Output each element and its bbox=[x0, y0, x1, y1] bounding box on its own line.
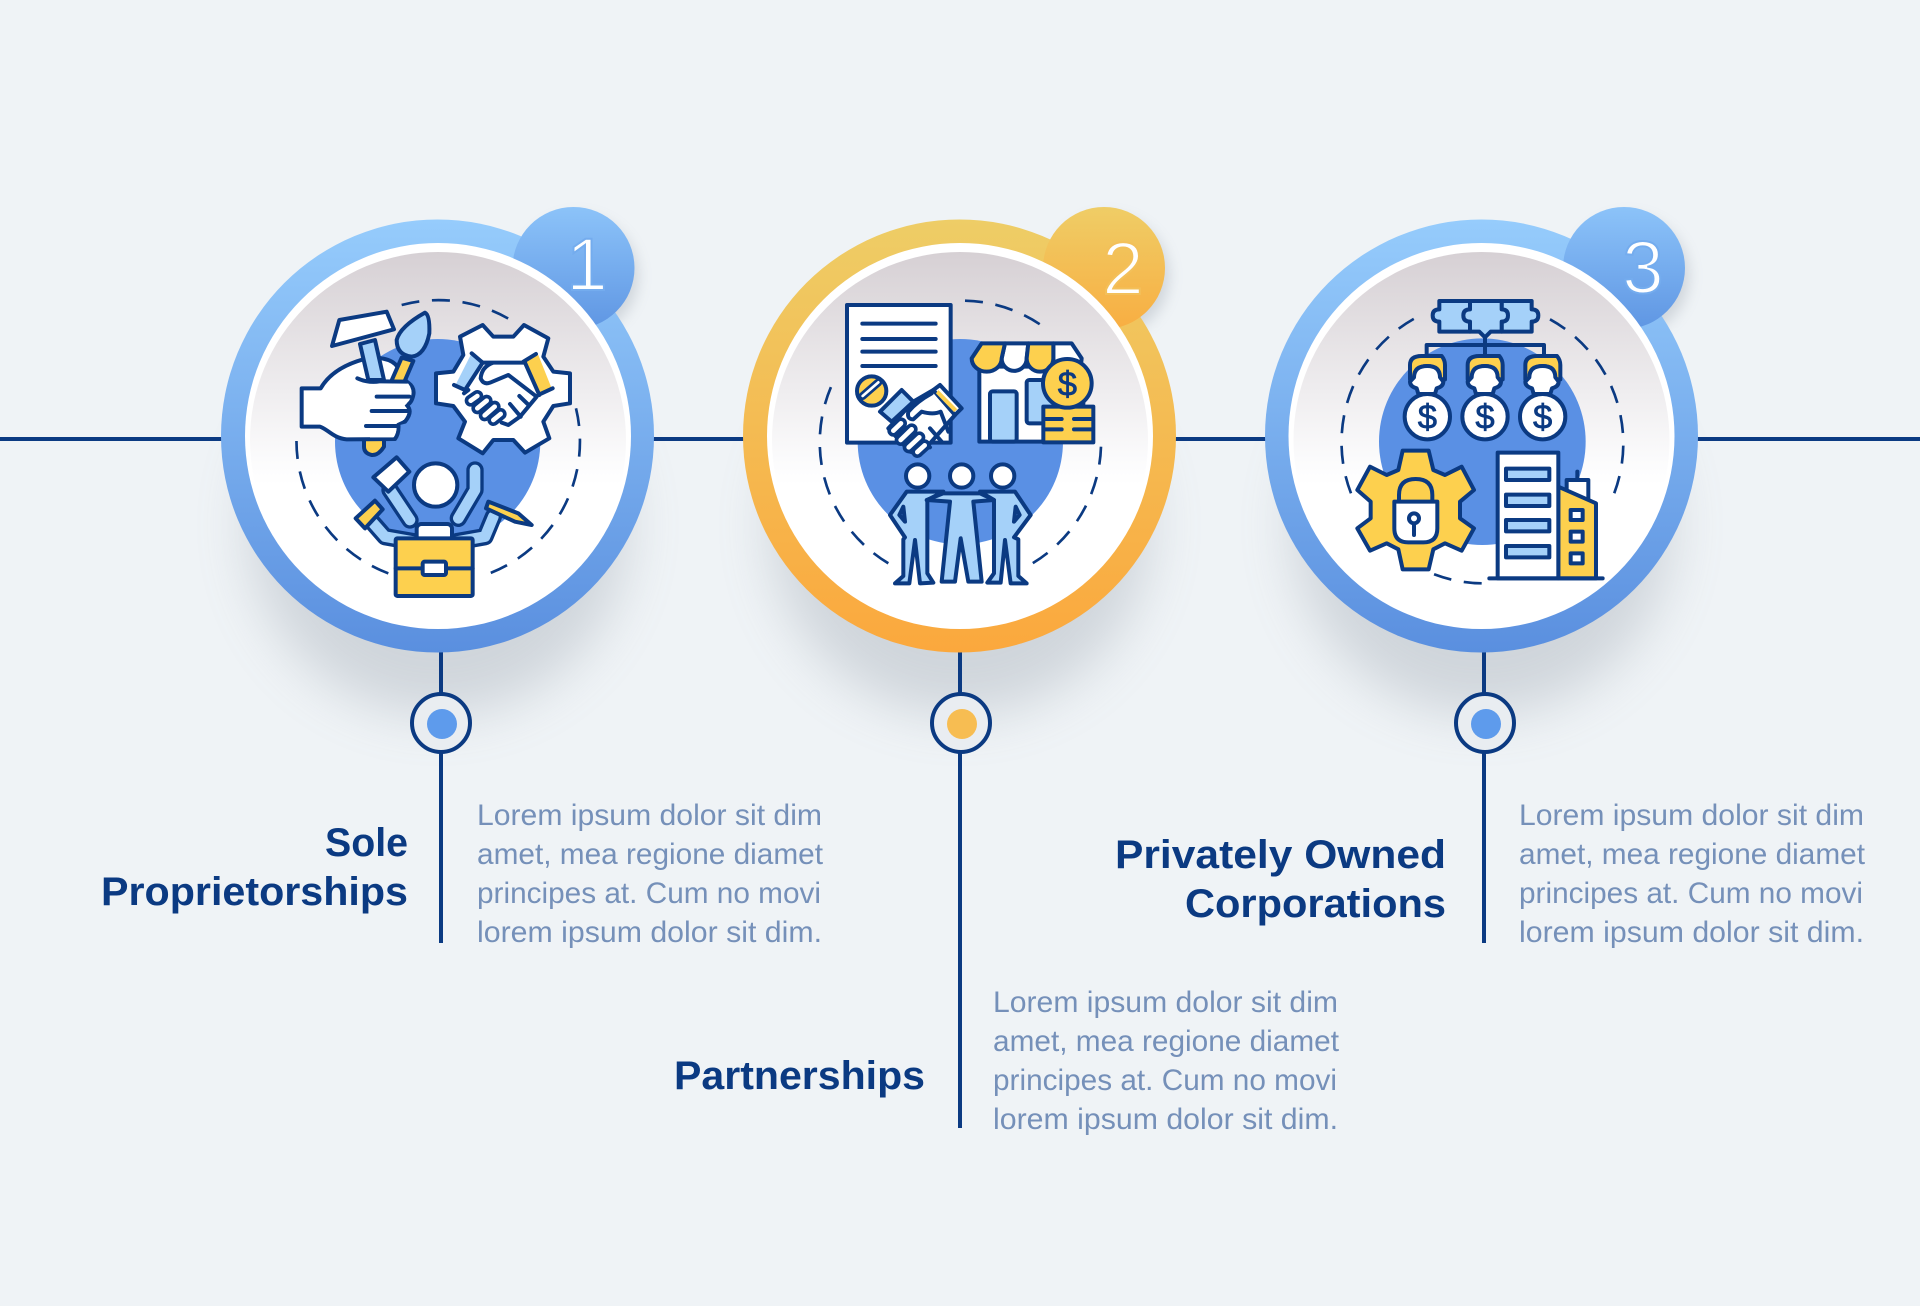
panel: privately owned corporations bbox=[1115, 207, 1866, 949]
dollar signs: $ bbox=[1418, 399, 1437, 437]
dollar signs: $ bbox=[1475, 399, 1495, 437]
vertical stem bbox=[1482, 640, 1486, 943]
number badge 1 bbox=[512, 207, 634, 329]
heading: Partnerships: Partnerships bbox=[674, 1054, 925, 1098]
org chart puzzle bbox=[1427, 301, 1544, 355]
vertical stem bbox=[439, 640, 443, 943]
circle shadow bbox=[248, 335, 628, 715]
badge shadow bbox=[1569, 216, 1689, 336]
description 3 bbox=[1519, 799, 1866, 949]
description 2: lorem ipsum dolor sit dim. bbox=[993, 1103, 1338, 1136]
heading: Sole Proprietorships: Sole bbox=[325, 821, 408, 865]
gear handshake bbox=[436, 325, 570, 453]
description 3: amet, mea regione diamet bbox=[1519, 838, 1866, 871]
dashed ring bbox=[1342, 314, 1623, 583]
office buildings bbox=[1489, 453, 1603, 578]
badge shadow bbox=[518, 216, 638, 336]
heading: Privately Owned Corporations: Privately Owned bbox=[1115, 833, 1446, 877]
description 1 bbox=[477, 799, 824, 949]
dashed ring bbox=[296, 300, 580, 577]
gear lock bbox=[1357, 451, 1474, 569]
outer ring bbox=[1265, 220, 1698, 652]
contract handshake bbox=[880, 385, 962, 455]
brush and hammer in hand bbox=[302, 312, 429, 455]
number 3: 3 bbox=[1622, 226, 1664, 309]
number badge 2 bbox=[1043, 207, 1165, 329]
timeline node bbox=[1456, 694, 1514, 752]
store with coins bbox=[972, 343, 1093, 442]
heading: Privately Owned Corporations bbox=[1115, 833, 1446, 926]
number 2: 2 bbox=[1102, 227, 1144, 310]
dollar signs: $ bbox=[1533, 399, 1552, 437]
inner bowl bbox=[1288, 243, 1674, 629]
shareholders bbox=[1405, 356, 1565, 439]
number badge 3 bbox=[1563, 207, 1685, 329]
description 3: principes at. Cum no movi bbox=[1519, 877, 1863, 910]
contract document bbox=[847, 305, 951, 443]
heading: Sole Proprietorships bbox=[101, 821, 408, 914]
description 1: amet, mea regione diamet bbox=[477, 838, 824, 871]
circle shadow bbox=[1292, 335, 1672, 715]
description 3: Lorem ipsum dolor sit dim bbox=[1519, 799, 1864, 832]
circle shadow bbox=[770, 335, 1150, 715]
description 2 bbox=[993, 986, 1340, 1136]
three partners bbox=[890, 464, 1031, 583]
dollar signs bbox=[1418, 399, 1552, 437]
inner bowl bbox=[245, 243, 631, 629]
dashed ring bbox=[820, 301, 1101, 567]
description 1: lorem ipsum dolor sit dim. bbox=[477, 916, 822, 949]
icon: corporation bbox=[1342, 301, 1623, 583]
outer ring bbox=[743, 220, 1176, 652]
description 2: amet, mea regione diamet bbox=[993, 1025, 1340, 1058]
badge shadow bbox=[1049, 216, 1169, 336]
description 3: lorem ipsum dolor sit dim. bbox=[1519, 916, 1864, 949]
description 1: Lorem ipsum dolor sit dim bbox=[477, 799, 822, 832]
outer ring bbox=[221, 220, 654, 652]
icon: sole proprietor tools bbox=[296, 300, 580, 596]
dollar sign: $ bbox=[1058, 365, 1077, 403]
disc bbox=[858, 339, 1063, 544]
heading: Sole Proprietorships: Proprietorships bbox=[101, 870, 408, 914]
disc bbox=[1379, 338, 1586, 545]
horizontal connector line bbox=[0, 437, 1920, 441]
icon: partnership bbox=[820, 301, 1101, 583]
number 1: 1 bbox=[566, 223, 608, 306]
description 2: principes at. Cum no movi bbox=[993, 1064, 1337, 1097]
heading: Privately Owned Corporations: Corporations bbox=[1185, 882, 1446, 926]
panel: sole proprietorships bbox=[101, 207, 824, 949]
vertical stem bbox=[958, 640, 962, 1128]
multitasking person with briefcase bbox=[356, 457, 532, 596]
description 2: Lorem ipsum dolor sit dim bbox=[993, 986, 1338, 1019]
timeline node bbox=[412, 694, 470, 752]
panel: partnerships bbox=[674, 207, 1340, 1136]
description 1: principes at. Cum no movi bbox=[477, 877, 821, 910]
inner bowl bbox=[767, 243, 1153, 629]
disc bbox=[335, 339, 540, 544]
timeline node bbox=[932, 694, 990, 752]
